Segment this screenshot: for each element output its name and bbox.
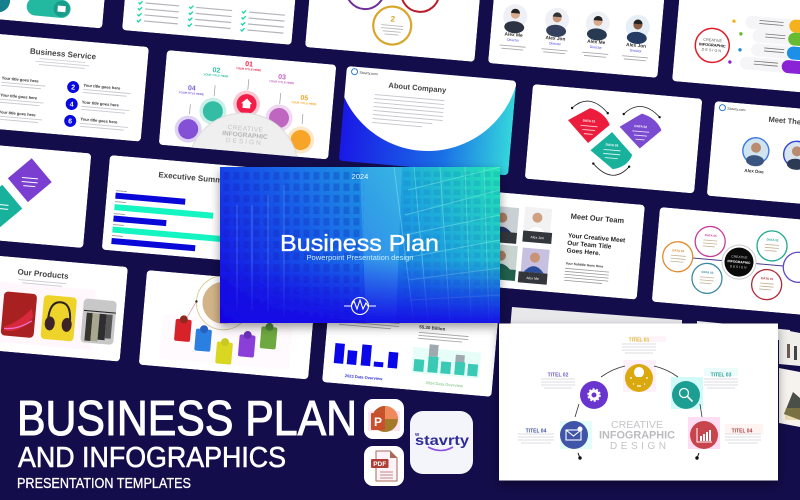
bar chart: 2023 (334, 342, 399, 369)
slide: semicircle five step infographic: INFOGRAPHIC (222, 130, 268, 141)
slide: red ring and pills: DESIGN (701, 48, 722, 53)
step titles: TITEL 04 (526, 428, 547, 434)
slide: four team members: Alex Me (504, 31, 523, 39)
slide: semicircle five step infographic: 04 (188, 85, 196, 93)
slide: four team members: Director (507, 38, 520, 43)
icon: pdf (364, 446, 404, 486)
step titles: TITEL 01 (629, 338, 650, 344)
infographic headline (599, 419, 675, 452)
step titles: TITEL 02 (548, 372, 569, 378)
slide: ring infographic: 2 (390, 14, 396, 24)
slide: three diamond infographic: DATA 01 (582, 118, 596, 124)
slide: data overview charts: 2024 Data Overview (425, 380, 464, 388)
slide: circular connected infographic: CREATIVE (731, 254, 748, 260)
slide: four team members: Alex Jon (626, 42, 646, 50)
connector end dots (578, 453, 699, 458)
slide: semicircle five step infographic (159, 50, 336, 160)
slide: business service: 4 (69, 101, 74, 109)
slide: right edge product photos (779, 329, 800, 427)
slide: semicircle five step infographic: YOUR TITLE HERE (179, 90, 204, 96)
slide: four team members: Alex Jon (545, 35, 566, 43)
slide: semicircle five step infographic: 03 (278, 74, 286, 81)
building background (220, 167, 500, 323)
icon: pulse logo (344, 298, 376, 314)
slide: three diamond infographic: DATA 02 (634, 124, 647, 129)
slide: red ring and pills: CREATIVE (703, 38, 723, 43)
step titles (526, 338, 753, 434)
slide: semicircle five step infographic: YOUR TITLE HERE (236, 66, 261, 72)
slide: red ring and pills: INFOGRAPHIC (699, 42, 726, 49)
slide: meet the team right: Alex Doe (744, 168, 764, 175)
slide: meet the team right: Stavrty.com (727, 107, 746, 112)
slide: meet our team: Goes Here. (566, 247, 601, 257)
slide: circular connected infographic: DATA 03 (701, 270, 714, 275)
slide: business service: Your title goes here (80, 116, 118, 125)
slide: semicircle five step infographic: YOUR TITLE HERE (291, 100, 317, 106)
slide: three diamond infographic: DATA 03 (605, 143, 619, 148)
icon: stavrty logo: stavrty (415, 432, 469, 448)
icon: powerpoint: P (374, 415, 382, 429)
slide: data overview charts: 55.30 Billion (419, 324, 446, 332)
slide: semicircle five step infographic: YOUR TITLE HERE (269, 79, 294, 85)
step: red chart (690, 421, 718, 449)
slide: meet our team: Meet Our Team (570, 212, 625, 225)
slide: data overview charts: 2023 Data Overview (345, 373, 383, 381)
slide: checklist (122, 0, 300, 45)
icon: stavrty logo (410, 411, 473, 474)
slide: about company: Stavrty.com (359, 71, 378, 76)
step: blue mail (560, 421, 588, 449)
infographic headline: DESIGN (610, 441, 666, 452)
slide: business service: Your title goes here (1, 75, 40, 84)
cover subtitle: Powerpoint Presentation design (306, 253, 414, 262)
step: teal search (672, 381, 700, 409)
step titles: TITEL 04 (732, 428, 753, 434)
infographic headline: CREATIVE (611, 419, 663, 431)
slide: our products: Our Products (17, 267, 69, 281)
slide: lower partly hidden slides (510, 307, 790, 340)
slide: semicircle five step infographic: 01 (245, 61, 253, 69)
slide: business service: Your title goes here (0, 92, 38, 101)
slide: semicircle five step infographic: 02 (212, 67, 221, 75)
cover title: Business Plan (280, 230, 439, 256)
bar chart: 2024 (411, 343, 482, 379)
product: sneaker photo (1, 291, 37, 338)
slide: four team members: Director (590, 45, 603, 50)
slide: business service: Your title goes here (83, 82, 121, 91)
connector arcs (575, 366, 702, 417)
slide: meet our team: Your Subtitle Goes Here (565, 261, 603, 269)
slide: semicircle five step infographic: DESIGN (226, 137, 263, 147)
slide: meet our team: Our Team Title (567, 240, 612, 251)
front panel: creative infographic design (499, 324, 778, 480)
step: purple gear (580, 381, 608, 409)
slide: circular connected infographic: DESIGN (730, 264, 747, 270)
slide: ring infographic (305, 0, 483, 62)
step description lines (518, 344, 761, 443)
slide: circular connected infographic: DATA 05 (705, 233, 717, 238)
slide: circular connected infographic: INFOGRAPHIC (727, 259, 751, 265)
slide: three diamond infographic (525, 84, 702, 193)
slide: hanging tags infographic (139, 269, 316, 379)
product: headphones photo (40, 295, 77, 342)
main slide: business plan cover (220, 167, 500, 323)
slide: circular connected infographic (652, 207, 800, 316)
slide: business service: 6 (68, 118, 72, 126)
slide: semicircle five step infographic: CREATIVE (227, 124, 264, 134)
slide: business service: 2 (71, 84, 75, 92)
slide: meet our team: Alex Me (526, 276, 539, 281)
slide: semicircle five step infographic: YOUR TITLE HERE (203, 72, 229, 78)
year: 2024 (352, 172, 368, 181)
slide: teal pill fragment (0, 0, 110, 28)
slide: meet the team right (707, 101, 800, 210)
subheadline: and infographics: AND INFOGRAPHICS (18, 442, 286, 474)
slide: circular connected infographic: DATA 04 (672, 248, 685, 253)
slide: data overview charts (322, 323, 498, 396)
slide: executive summary: Executive Summary (158, 170, 235, 186)
slide: four team members: Director (549, 41, 562, 46)
slide: left diamonds (0, 139, 91, 248)
slide: four team members (488, 0, 666, 78)
product: clothes rack photo (80, 298, 117, 345)
headline: business plan: BUSINESS PLAN (17, 392, 357, 446)
icon: stavrty logo: W (415, 432, 420, 437)
slide: meet our team: Alex Jon (530, 235, 544, 240)
slide: red ring and pills (672, 0, 800, 96)
slide: four team members: Alex Me (587, 39, 606, 46)
slide: executive summary (102, 155, 246, 260)
slide: semicircle five step infographic: 05 (300, 95, 309, 102)
slide: our products (0, 252, 128, 362)
slide: about company (339, 66, 516, 176)
icon: powerpoint (364, 399, 404, 439)
slide: meet our team (500, 192, 645, 300)
infographic headline: INFOGRAPHIC (599, 430, 675, 442)
icon: pdf: PDF (373, 461, 386, 468)
slide: meet our team: Your Creative Meet (568, 232, 626, 244)
slide: business service: Your title goes here (82, 99, 120, 108)
slide: circular connected infographic: DATA 02 (766, 237, 779, 242)
slide: four team members: Director (630, 48, 643, 53)
slide: circular connected infographic: DATA 01 (761, 276, 774, 281)
slide: business service: Business Service (30, 47, 97, 61)
step titles: TITEL 03 (711, 372, 732, 378)
slide: about company: About Company (388, 81, 447, 95)
slide: business service (0, 32, 149, 142)
tagline: presentation templates: PRESENTATION TEMPLATES (17, 475, 191, 492)
step: yellow bulb (625, 364, 653, 392)
